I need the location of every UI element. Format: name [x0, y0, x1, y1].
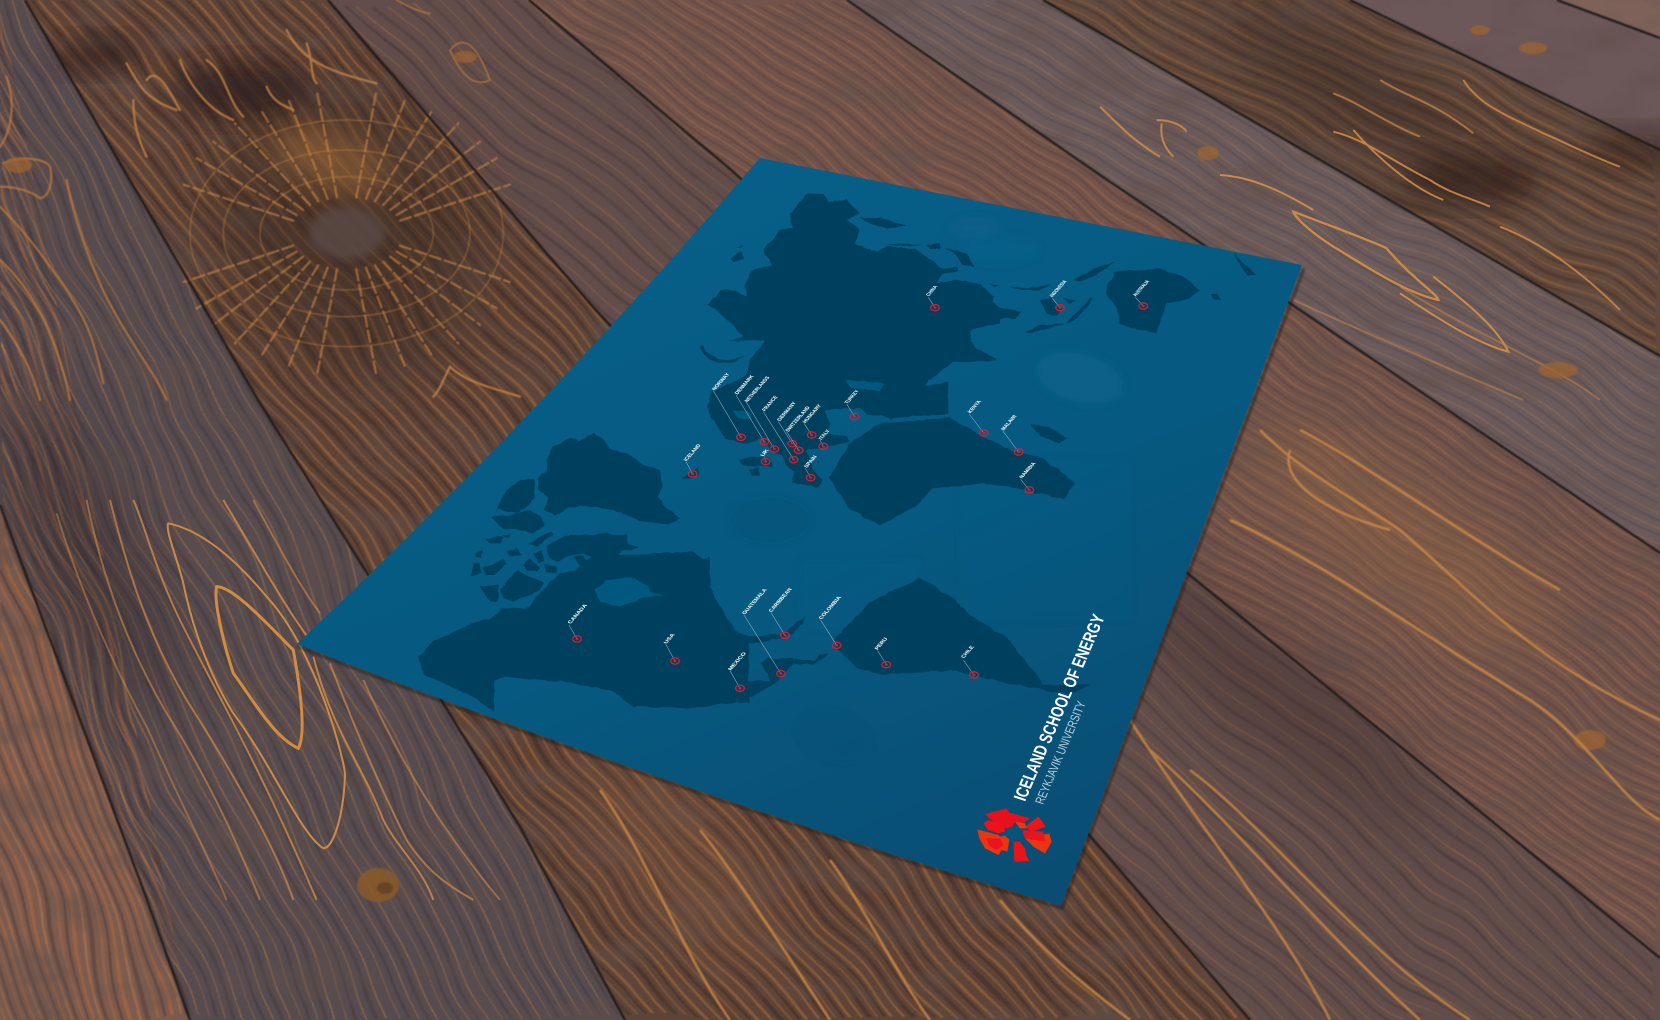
pin: Germany — [777, 402, 798, 447]
country pins: Europe and Africa — [683, 373, 1038, 493]
pin: Peru — [874, 637, 891, 668]
pin: Netherlands — [744, 376, 779, 452]
plank: reddish — [529, 0, 1660, 958]
pin: Australia — [1133, 280, 1152, 309]
landmasses in wide view — [419, 339, 1090, 712]
Caspian Sea — [845, 379, 885, 390]
Arctic islands — [492, 510, 545, 533]
grain: left diamonds — [57, 500, 500, 900]
New Guinea — [1073, 262, 1115, 282]
poster sheet — [297, 158, 1302, 906]
knots: right planks — [4, 25, 1606, 750]
pin: Turkey: TURKEY — [844, 390, 861, 405]
pin: Norway — [712, 373, 745, 440]
Hudson Bay — [595, 577, 663, 607]
pin: Italy: ITALY — [818, 429, 832, 441]
pin: Indonesia: INDONESIA — [1049, 279, 1069, 298]
Canada mainland north — [487, 552, 710, 627]
Alaska-facing strip — [860, 218, 907, 228]
pin: Mexico: MEXICO — [728, 652, 748, 671]
pin: France: FRANCE — [762, 396, 779, 412]
plank: grey with diamonds — [847, 0, 1660, 553]
Ireland — [748, 467, 761, 476]
faded portraits — [730, 217, 1130, 773]
pin: USA — [663, 633, 679, 664]
pin: Canada: CANADA — [567, 603, 589, 625]
country pins: Americas — [567, 588, 978, 691]
map: continents traced in perspective — [419, 193, 1257, 712]
pin: Colombia: COLOMBIA — [818, 595, 843, 620]
Novaya arc — [700, 346, 747, 363]
northern islands — [730, 252, 743, 262]
subtitle: Reykjavik University: REYKJAVIK UNIVERSITY — [1033, 700, 1089, 806]
pin: USA: USA — [663, 633, 677, 645]
pin: Hungary: HUNGARY — [802, 404, 823, 424]
grain: lower right planks — [600, 430, 1660, 1020]
pin: Netherlands: NETHERLANDS — [744, 376, 771, 403]
pin: Turkey — [844, 390, 861, 420]
New Zealand and Tasmania — [1210, 252, 1257, 300]
Hudson Bay, Gulf and North America east — [503, 553, 828, 708]
pin: China: CHINA — [926, 285, 940, 297]
pin: Kenya — [967, 400, 988, 436]
pin: Kenya: KENYA — [967, 400, 983, 414]
pin: Switzerland: SWITZERLAND — [785, 406, 812, 433]
pin: Colombia — [818, 595, 843, 648]
pin: Spain — [804, 455, 819, 481]
Siberia and northern Asia — [700, 193, 1000, 380]
pin: Germany: GERMANY — [777, 402, 798, 422]
pin: Malawi: MALAWI — [1001, 415, 1019, 431]
pin: Norway: NORWAY — [712, 373, 731, 391]
northern Asia mainland — [707, 193, 1000, 380]
title: Iceland School of Energy: ICELAND SCHOOL OF ENERGY — [1010, 612, 1109, 803]
plank: upper right — [1350, 0, 1660, 150]
Madagascar — [1030, 424, 1067, 443]
plank: left grey — [0, 0, 625, 1020]
pin: Namibia: NAMIBIA — [1019, 461, 1038, 479]
pin: Denmark: DENMARK — [734, 374, 756, 395]
plank: lower left — [0, 0, 190, 1020]
pin: Indonesia — [1049, 279, 1069, 311]
pin: Australia: AUSTRALIA — [1133, 280, 1152, 297]
pin: Denmark — [734, 374, 769, 445]
pin: Guatemala — [742, 588, 785, 677]
pin: Peru: PERU — [874, 637, 889, 651]
pin: Iceland: ICELAND — [683, 443, 703, 462]
pin: UK: UK — [760, 448, 771, 457]
pin: France — [762, 396, 798, 463]
pin: Namibia — [1019, 461, 1038, 493]
knot: left lower — [357, 868, 399, 902]
Australia — [1107, 269, 1200, 333]
Caribbean islands — [780, 617, 805, 635]
pin: Iceland — [683, 443, 703, 477]
Indochina — [900, 280, 1022, 340]
Southeast Asia and Australia — [900, 244, 1200, 340]
pin: Caribbean: CARIBBEAN — [768, 588, 794, 613]
pin: Hungary — [802, 404, 823, 438]
Greenland — [538, 433, 680, 525]
pin: China — [926, 285, 940, 311]
Iceland — [680, 467, 698, 479]
pin: Switzerland — [785, 406, 812, 453]
plank: corner — [1557, 0, 1660, 38]
grain: right diamonds — [1100, 80, 1620, 400]
plank: dark swirl — [25, 0, 1250, 1020]
poster shadow — [297, 268, 1304, 908]
Sumatra — [1025, 323, 1065, 333]
UK — [738, 457, 772, 467]
North America west — [419, 588, 749, 712]
plank: dark knotted — [1043, 0, 1660, 356]
Africa — [829, 418, 1075, 526]
Baltic Sea — [733, 410, 751, 419]
Europe mainland — [707, 373, 948, 487]
Japan — [945, 248, 974, 267]
Philippines — [1010, 285, 1050, 290]
pin: Canada — [567, 603, 589, 642]
pin: Spain: SPAIN — [804, 455, 819, 469]
country pins: Asia Pacific — [926, 279, 1152, 311]
grain: swirl top left — [0, 0, 520, 400]
pin: Caribbean — [768, 588, 794, 638]
North America east — [503, 553, 828, 708]
logo: red sunburst mark — [977, 808, 1052, 862]
South America — [836, 578, 1090, 695]
pin: UK — [760, 448, 771, 465]
Borneo — [1040, 298, 1063, 315]
poster: world map — [297, 158, 1302, 906]
Asia south — [712, 339, 997, 419]
Greenland and Arctic Canada — [471, 433, 710, 627]
pin: Malawi — [1001, 415, 1023, 455]
Ellesmere — [497, 479, 535, 513]
pin: Guatemala: GUATEMALA — [742, 588, 769, 615]
pin: Chile: CHILE — [961, 646, 976, 659]
Europe and Arabia — [707, 373, 948, 487]
pin: Chile — [961, 646, 978, 678]
pin: Italy — [818, 429, 832, 449]
pin: Mexico — [728, 652, 748, 691]
